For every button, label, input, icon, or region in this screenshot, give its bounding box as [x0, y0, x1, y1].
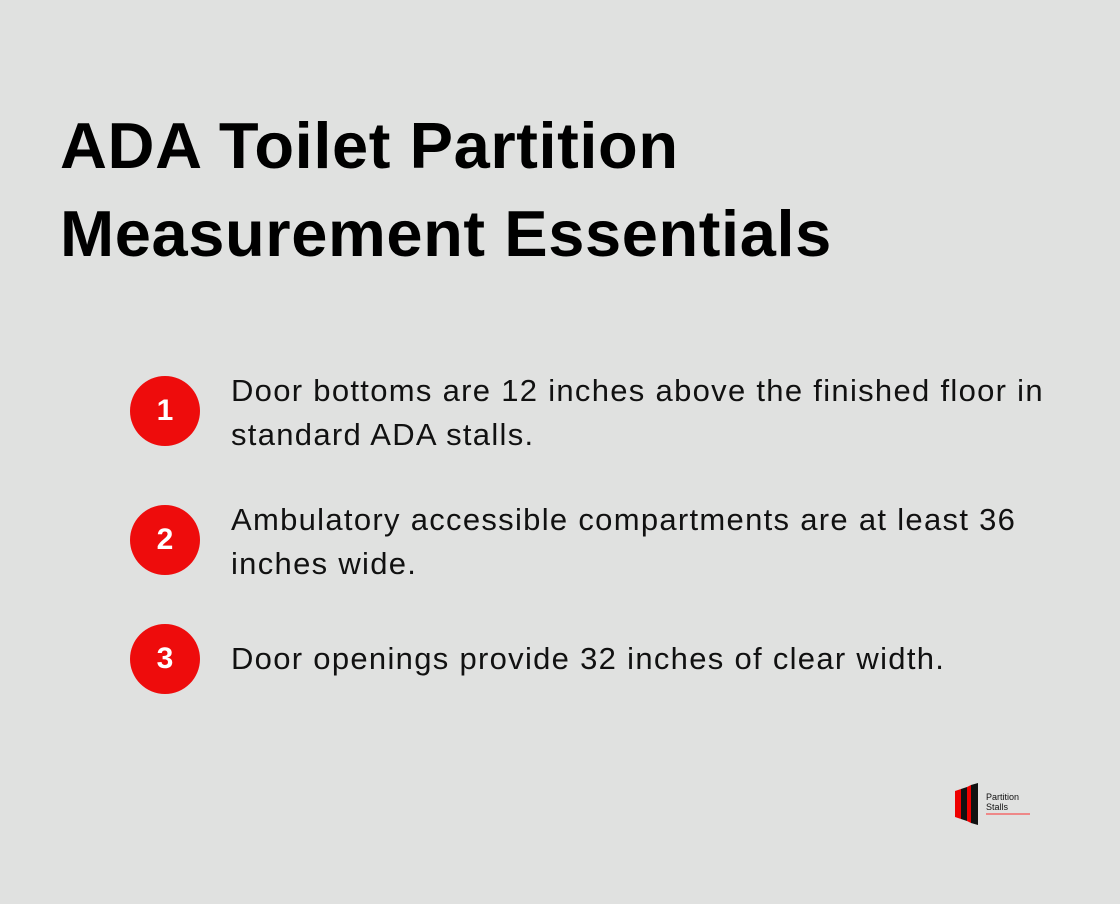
text 1: standard ADA stalls.: [231, 417, 534, 452]
text 2: Ambulatory accessible compartments are at least 36: [231, 502, 1016, 537]
item 3: [130, 624, 945, 694]
icon: number 1: [130, 376, 200, 446]
text 3: Door openings provide 32 inches of clear width.: [231, 641, 945, 676]
icon: number 2: [130, 505, 200, 575]
icon: number 2: 2: [157, 523, 173, 556]
icon: number 1: 1: [157, 394, 173, 427]
text 1: [231, 373, 1044, 452]
title: ADA Toilet Partition: [60, 109, 679, 182]
icon: number 3: [130, 624, 200, 694]
logo: Stalls: [986, 802, 1008, 812]
item 2: [130, 502, 1016, 581]
text 1: Door bottoms are 12 inches above the finished floor in: [231, 373, 1044, 408]
title: Measurement Essentials: [60, 197, 832, 270]
text 2: [231, 502, 1016, 581]
title: [60, 109, 832, 270]
logo: Partition: [986, 792, 1019, 802]
text 2: inches wide.: [231, 546, 417, 581]
icon: number 3: 3: [157, 642, 173, 675]
item 1: [130, 373, 1044, 452]
logo: [955, 783, 1030, 825]
